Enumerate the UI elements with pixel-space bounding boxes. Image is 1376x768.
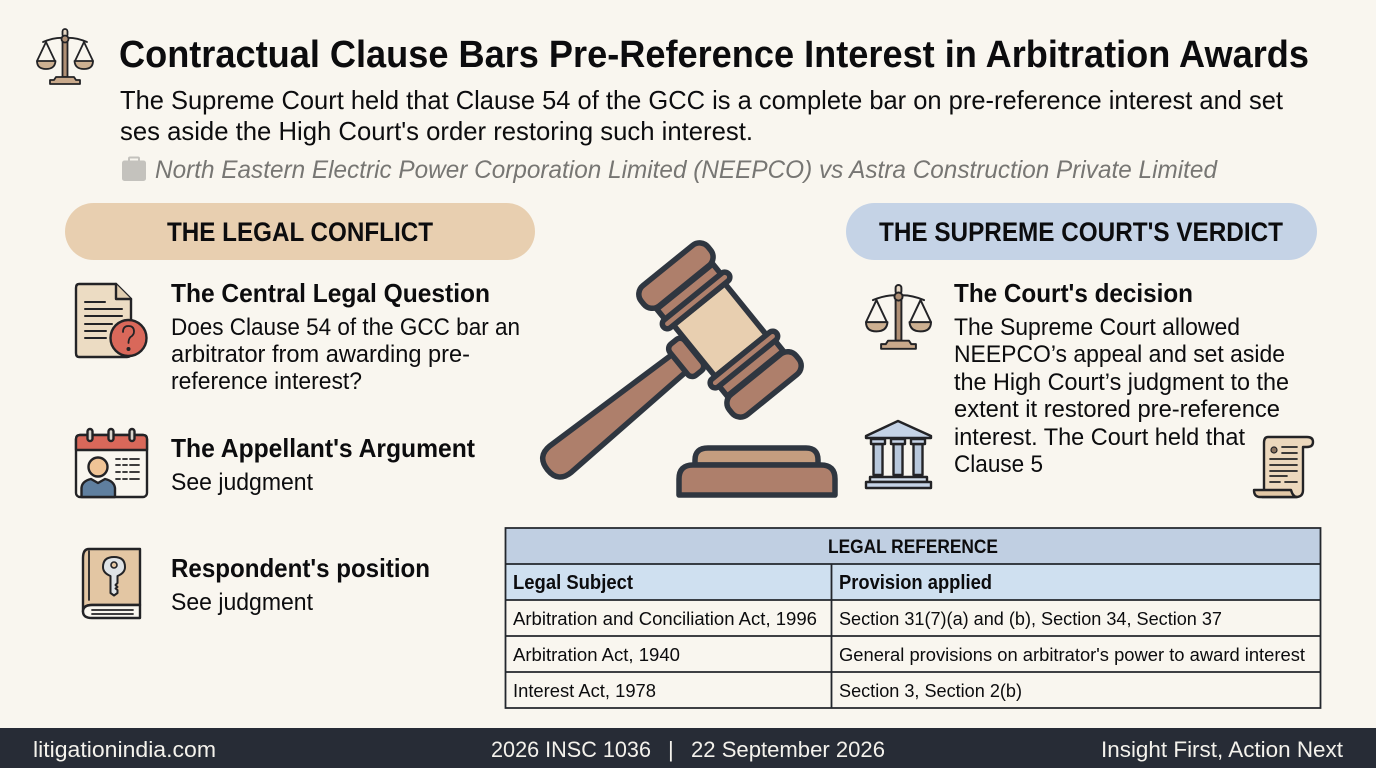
text: the court's decision: interest. The Court held that xyxy=(954,424,1245,451)
footer bar: 22 September 2026 xyxy=(691,737,885,762)
gavel xyxy=(495,238,806,534)
subtitle: ses aside the High Court's order restoring such interest. xyxy=(120,116,753,146)
text: the central legal question: The Central Legal Question xyxy=(171,278,490,308)
text: the appellant's argument xyxy=(171,433,475,496)
heading pill: the supreme court's verdict xyxy=(846,203,1317,260)
table row: 1940 act xyxy=(513,644,1305,665)
text: the central legal question xyxy=(171,278,520,395)
text: the central legal question: Does Clause 54 of the GCC bar an xyxy=(171,314,520,341)
heading pill: the legal conflict xyxy=(65,203,535,260)
icon: book with key xyxy=(83,549,140,618)
table row: 1940 act: Arbitration Act, 1940 xyxy=(513,644,680,665)
subtitle: The Supreme Court held that Clause 54 of the GCC is a complete bar on pre-reference interest and set xyxy=(120,85,1284,115)
footer bar: 2026 INSC 1036 xyxy=(491,737,651,762)
table header: legal reference: LEGAL REFERENCE xyxy=(828,537,998,558)
heading pill: the legal conflict: THE LEGAL CONFLICT xyxy=(167,217,433,247)
table column headings: Provision applied xyxy=(839,572,992,594)
text: the court's decision: The Supreme Court allowed xyxy=(954,314,1240,341)
text: respondent's position: See judgment xyxy=(171,589,313,616)
icon: calendar with person xyxy=(76,429,147,497)
text: respondent's position xyxy=(171,553,430,616)
footer bar: Insight First, Action Next xyxy=(1101,737,1343,762)
heading pill: the supreme court's verdict: THE SUPREME COURT'S VERDICT xyxy=(879,217,1283,247)
text: respondent's position: Respondent's position xyxy=(171,553,430,583)
case name line xyxy=(122,156,1218,184)
table row: interest act xyxy=(513,680,1022,701)
panel: the supreme court's verdict xyxy=(846,203,1317,497)
icon: court building xyxy=(866,421,931,488)
table row: 1940 act: General provisions on arbitrator's power to award interest xyxy=(839,644,1305,665)
icon: scroll xyxy=(1254,437,1313,497)
icon: gavel and sound block xyxy=(495,238,835,534)
subtitle xyxy=(120,85,1284,146)
panel: the legal conflict xyxy=(65,203,535,618)
title: Contractual Clause Bars Pre-Reference Interest in Arbitration Awards xyxy=(119,34,1309,76)
text: the central legal question: reference interest? xyxy=(171,368,362,395)
text: the central legal question: arbitrator from awarding pre- xyxy=(171,341,470,368)
text: the court's decision: NEEPCO’s appeal and set aside xyxy=(954,341,1285,368)
icon: briefcase xyxy=(122,158,146,181)
text: the court's decision: Clause 5 xyxy=(954,451,1043,478)
table row: interest act: Section 3, Section 2(b) xyxy=(839,680,1022,701)
table row: interest act: Interest Act, 1978 xyxy=(513,680,656,701)
text: the court's decision: extent it restored pre-reference xyxy=(954,396,1280,423)
footer bar: litigationindia.com xyxy=(33,737,216,762)
text: the court's decision xyxy=(954,278,1289,478)
footer bar xyxy=(0,728,1376,768)
text: the appellant's argument: The Appellant's Argument xyxy=(171,433,475,463)
table row: 1996 act: Section 31(7)(a) and (b), Section 34, Section 37 xyxy=(839,608,1222,629)
table row: 1996 act: Arbitration and Conciliation Act, 1996 xyxy=(513,608,817,629)
table header: legal reference xyxy=(506,528,1320,564)
icon: scales of justice (header) xyxy=(37,29,93,84)
icon: document with question mark xyxy=(76,284,146,357)
case name: North Eastern Electric Power Corporation Limited (NEEPCO) vs Astra Construction Private Limited xyxy=(155,156,1218,184)
text: the court's decision: the High Court’s judgment to the xyxy=(954,369,1289,396)
table: legal reference xyxy=(506,528,1320,708)
text: the appellant's argument: See judgment xyxy=(171,469,313,496)
table column headings: Legal Subject xyxy=(513,572,633,594)
text: the court's decision: The Court's decision xyxy=(954,278,1193,308)
footer bar: | xyxy=(668,737,674,762)
sound block xyxy=(679,448,835,495)
table row: 1996 act xyxy=(513,608,1222,629)
table column headings xyxy=(506,564,1320,600)
icon: scales of justice (verdict) xyxy=(866,285,931,349)
